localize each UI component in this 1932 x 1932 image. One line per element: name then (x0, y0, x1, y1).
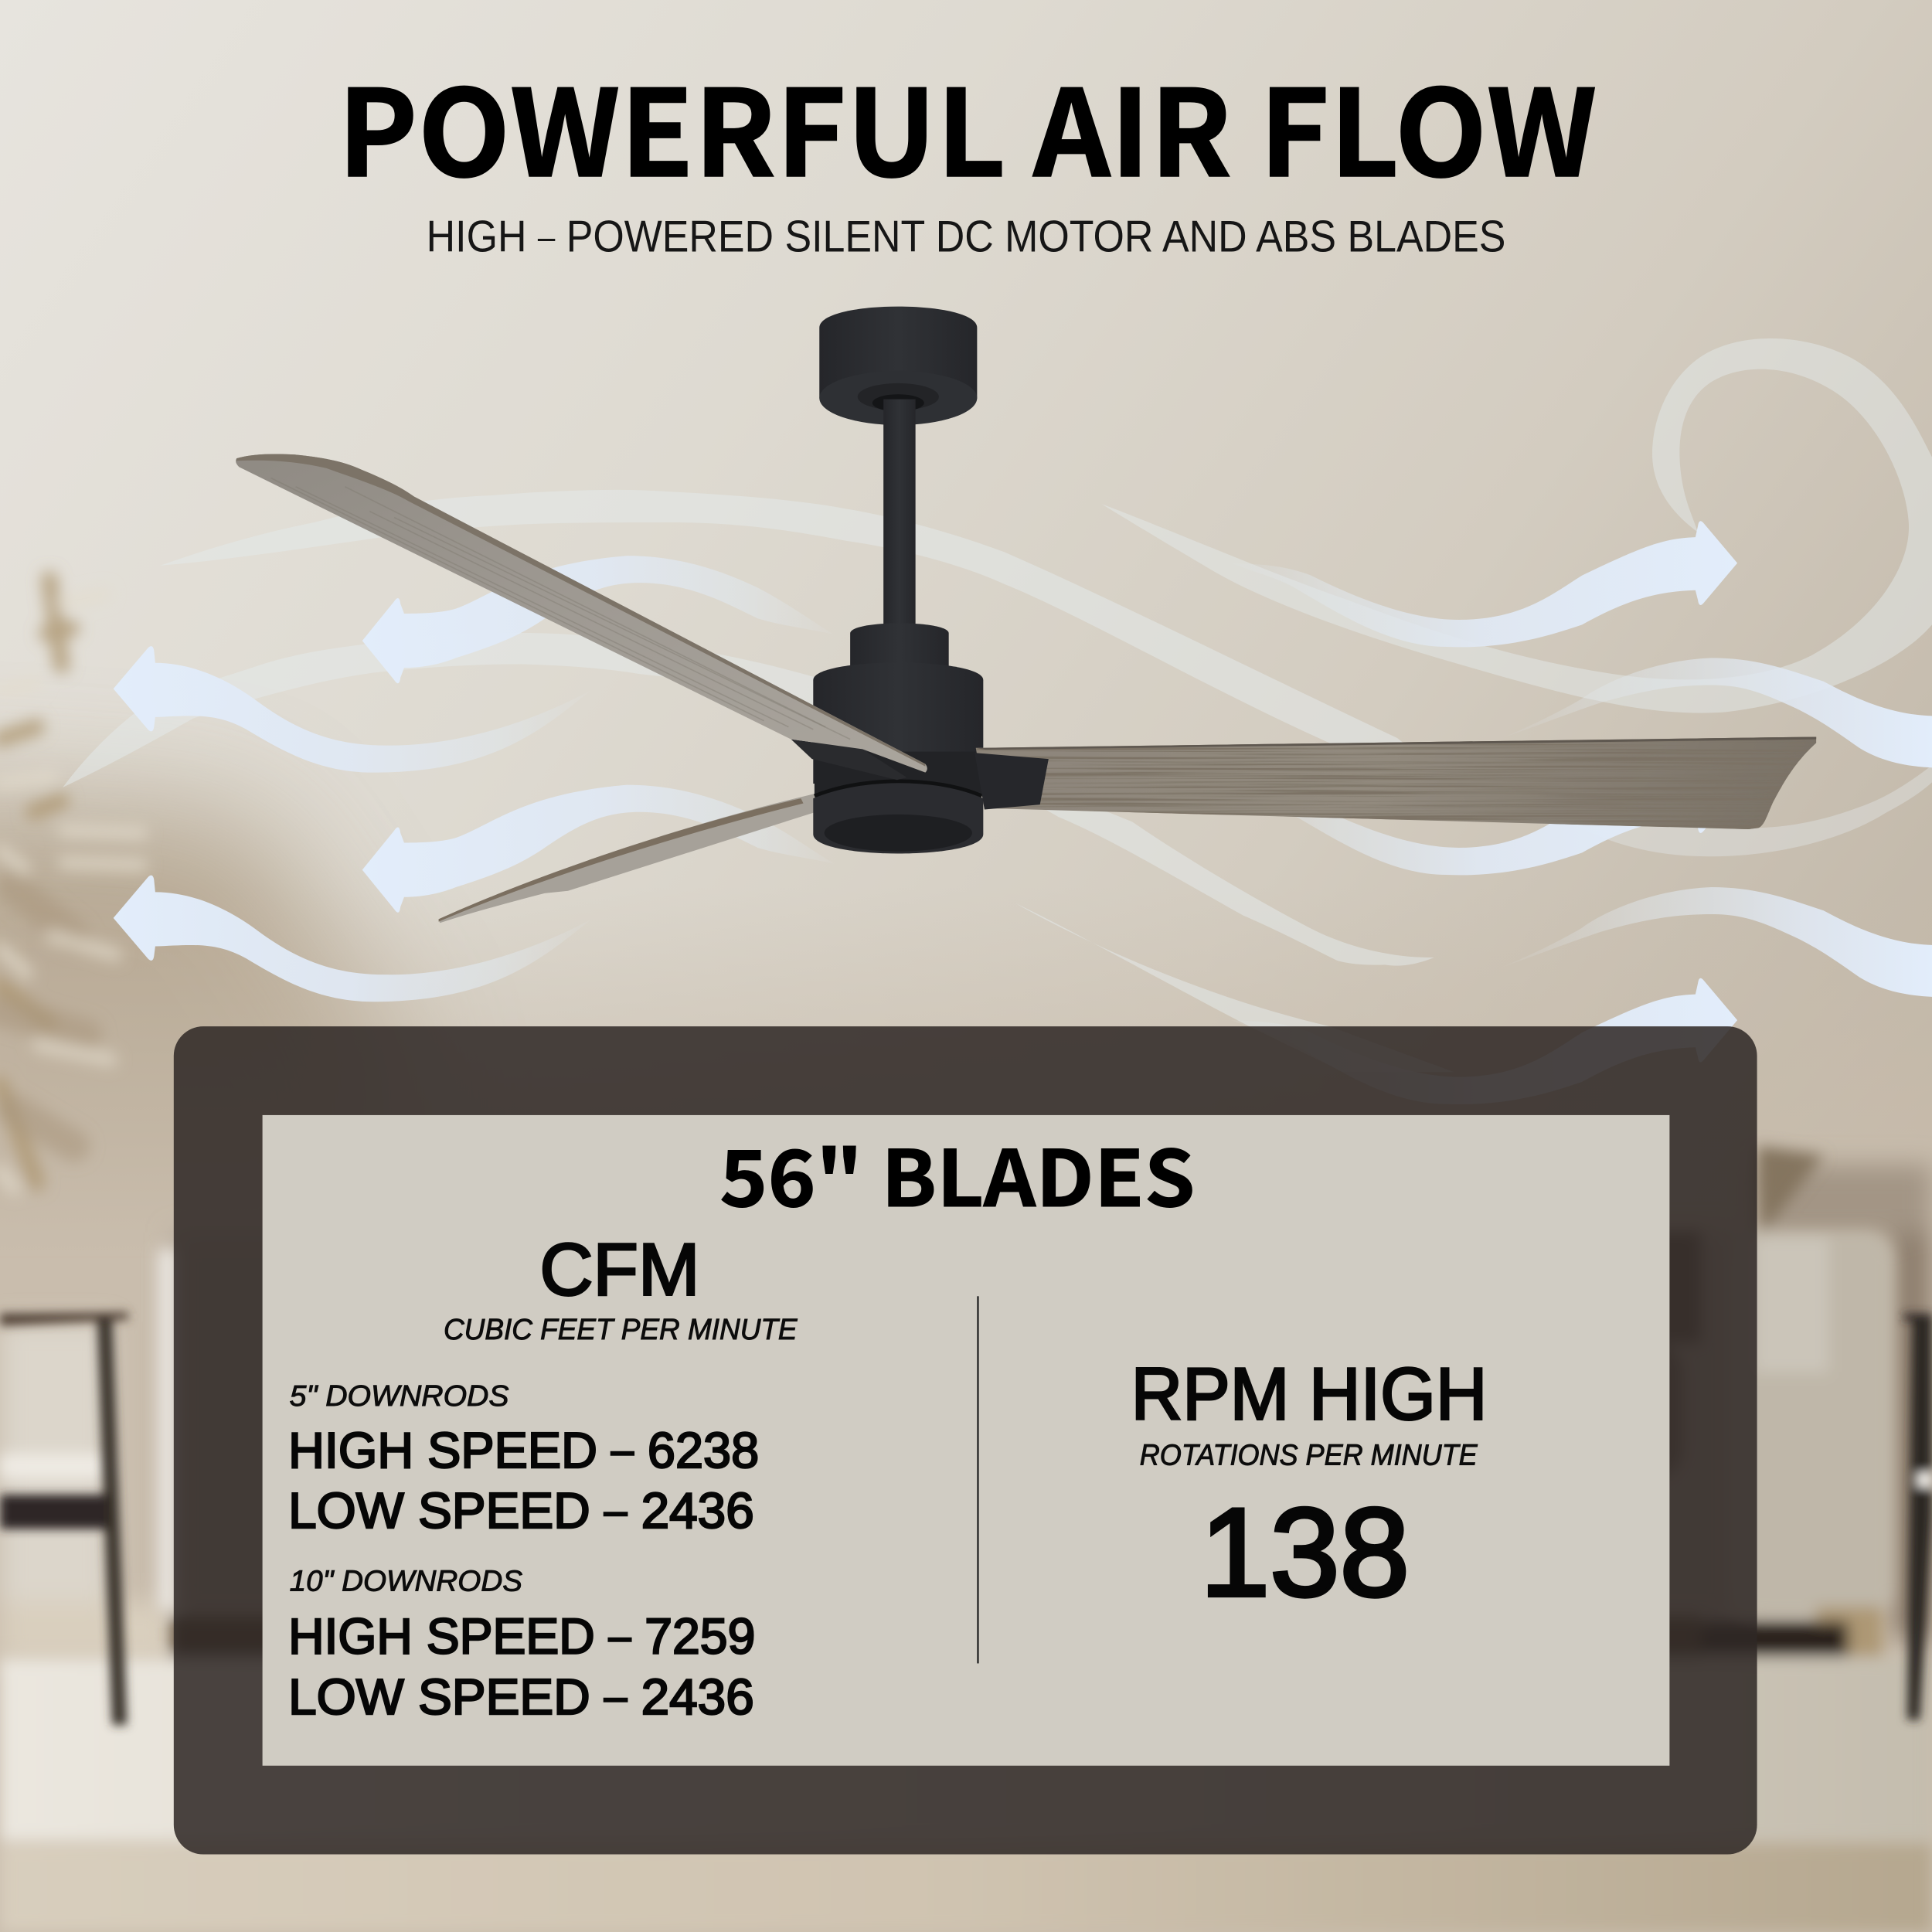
5 inch low speed value: – (604, 1488, 628, 1533)
downrod (883, 400, 916, 628)
CFM heading: CFM (539, 1229, 700, 1311)
RPM heading: RPM HIGH (1131, 1353, 1487, 1436)
fan blade: upper left (236, 454, 927, 773)
10 inch low speed value: – (604, 1674, 628, 1719)
background: blurred pampas plant (0, 579, 141, 1189)
ceiling canopy (819, 307, 977, 425)
5 inch downrods label: 5" DOWNRODS (290, 1379, 509, 1413)
10 inch high speed value: HIGH SPEED (288, 1608, 600, 1665)
fan blade: main right (976, 736, 1816, 829)
10 inch low speed value: 2436 (627, 1668, 754, 1725)
panel heading: blade size: 56" BLADES (719, 1116, 1196, 1229)
subtitle: – (538, 219, 556, 257)
air flow wave: right edge upper (1502, 658, 1932, 767)
subtitle: HIGH (427, 212, 537, 261)
5 inch high speed value: HIGH SPEED (288, 1422, 600, 1478)
spec panel: dark translucent card (174, 1026, 1757, 1855)
title: POWERFUL AIR FLOW (338, 38, 1597, 211)
10 inch low speed value: LOW SPEED (288, 1668, 589, 1725)
air flow arrow: upper middle left (362, 556, 834, 683)
CFM column (288, 1229, 798, 1725)
motor housing (813, 623, 983, 854)
CFM subheading: CUBIC FEET PER MINUTE (444, 1313, 798, 1346)
RPM value: 138 (1200, 1483, 1410, 1623)
air flow arrow: upper right (1231, 521, 1737, 647)
ceiling fan (236, 307, 1816, 923)
air flow wave: right edge lower (1502, 887, 1932, 997)
air flow arrow: lower right (1231, 978, 1737, 1104)
5 inch high speed value: 6238 (634, 1422, 759, 1478)
air flow arrow: middle right behind blade (1231, 749, 1737, 875)
faint air swirl bands (63, 338, 1932, 1072)
5 inch high speed value: – (611, 1427, 634, 1473)
subtitle: POWERED SILENT DC MOTOR AND ABS BLADES (555, 212, 1505, 261)
column divider (977, 1296, 979, 1663)
RPM column (1131, 1353, 1487, 1623)
5 inch low speed value: 2436 (627, 1482, 754, 1539)
spec panel: light inner card (263, 1115, 1669, 1766)
blade bracket: right (975, 753, 1049, 810)
5 inch low speed value: LOW SPEED (288, 1482, 589, 1539)
10 inch high speed value: – (609, 1614, 631, 1659)
RPM subheading: ROTATIONS PER MINUTE (1140, 1439, 1478, 1472)
blade bracket: left (791, 740, 906, 780)
fan blade: lower left (439, 794, 815, 923)
10 inch downrods label: 10" DOWNRODS (290, 1564, 522, 1597)
air flow arrow: lower left (114, 876, 591, 1002)
air flow arrow: lower middle left (362, 785, 834, 913)
10 inch high speed value: 7259 (631, 1608, 755, 1665)
air flow arrow: upper left (114, 646, 591, 773)
